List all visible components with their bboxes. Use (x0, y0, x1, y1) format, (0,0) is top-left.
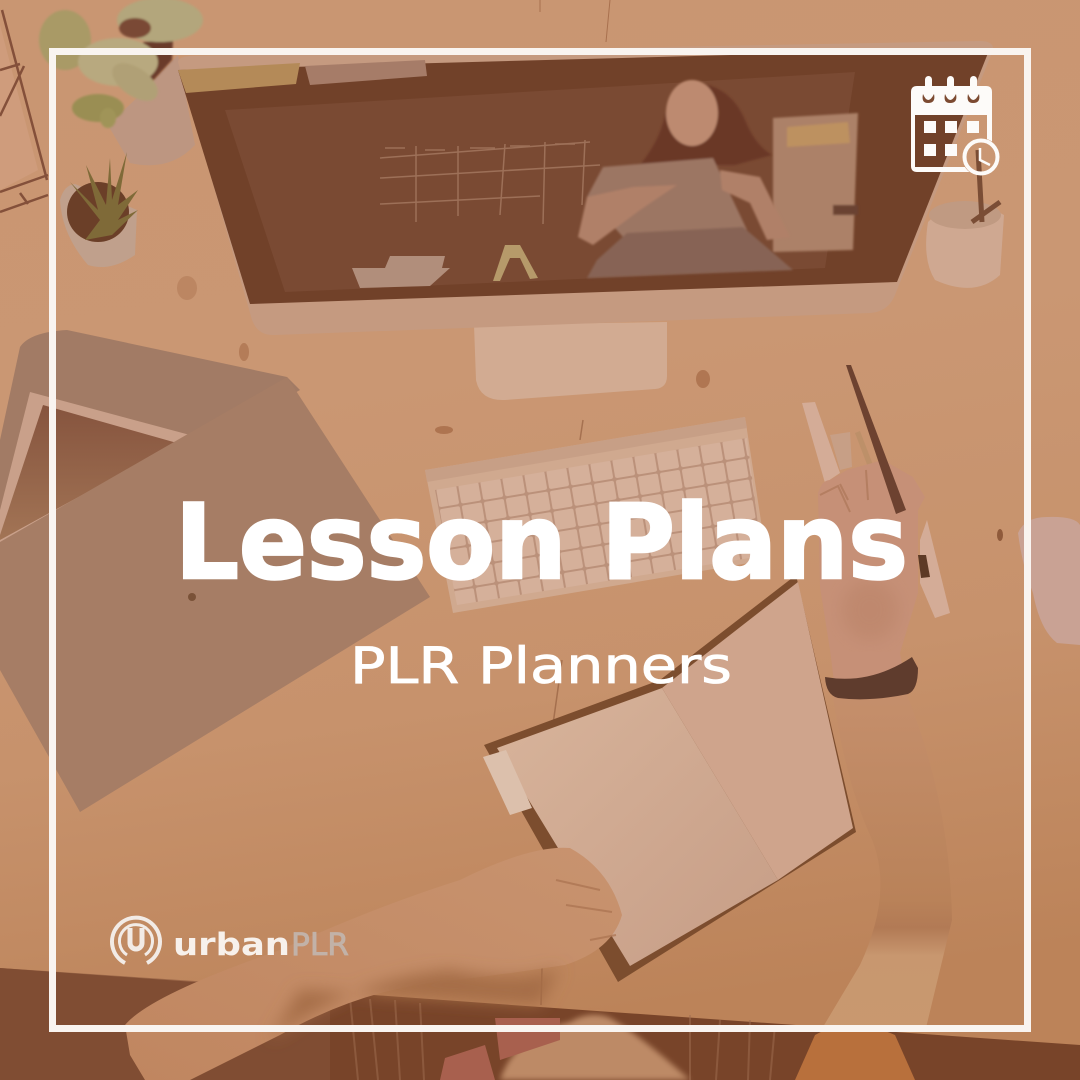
woman on screen (578, 80, 793, 278)
pencil cup right (926, 150, 1004, 288)
chalkboard chart on screen (380, 140, 600, 224)
monitor body (178, 41, 993, 335)
logo: urbanPLR (112, 918, 349, 963)
monitor stand (474, 322, 667, 400)
logo: urbanPLR: PLR (291, 927, 349, 963)
props on screen (352, 256, 450, 288)
title: Lesson Plans (175, 483, 908, 603)
wristwatch (825, 657, 918, 699)
whiteboard on screen (773, 113, 858, 252)
hand (818, 460, 925, 690)
logo mark (112, 918, 160, 963)
subtitle: PLR Planners (350, 637, 732, 695)
monitor screen (178, 48, 990, 304)
plant: large succulent in white pot (39, 0, 203, 165)
keyboard (425, 417, 767, 613)
wire tray top left (0, 10, 48, 212)
icon: calendar with clock (911, 76, 998, 174)
dark floor strip below desk (0, 968, 1080, 1080)
tablet (0, 392, 190, 545)
open notebook (483, 575, 856, 982)
right arm and hand (818, 365, 952, 1032)
pencils right of keyboard (802, 402, 950, 618)
plant: small spiky succulent in white pot (60, 152, 138, 267)
pencil in hand (846, 365, 906, 514)
felt envelope (0, 330, 430, 812)
left arm and hand (125, 848, 622, 1080)
logo wordmark: urban (173, 927, 290, 963)
desktop monitor (178, 41, 993, 400)
head and shirt at bottom edge (440, 1015, 915, 1080)
mouse (1018, 517, 1080, 645)
